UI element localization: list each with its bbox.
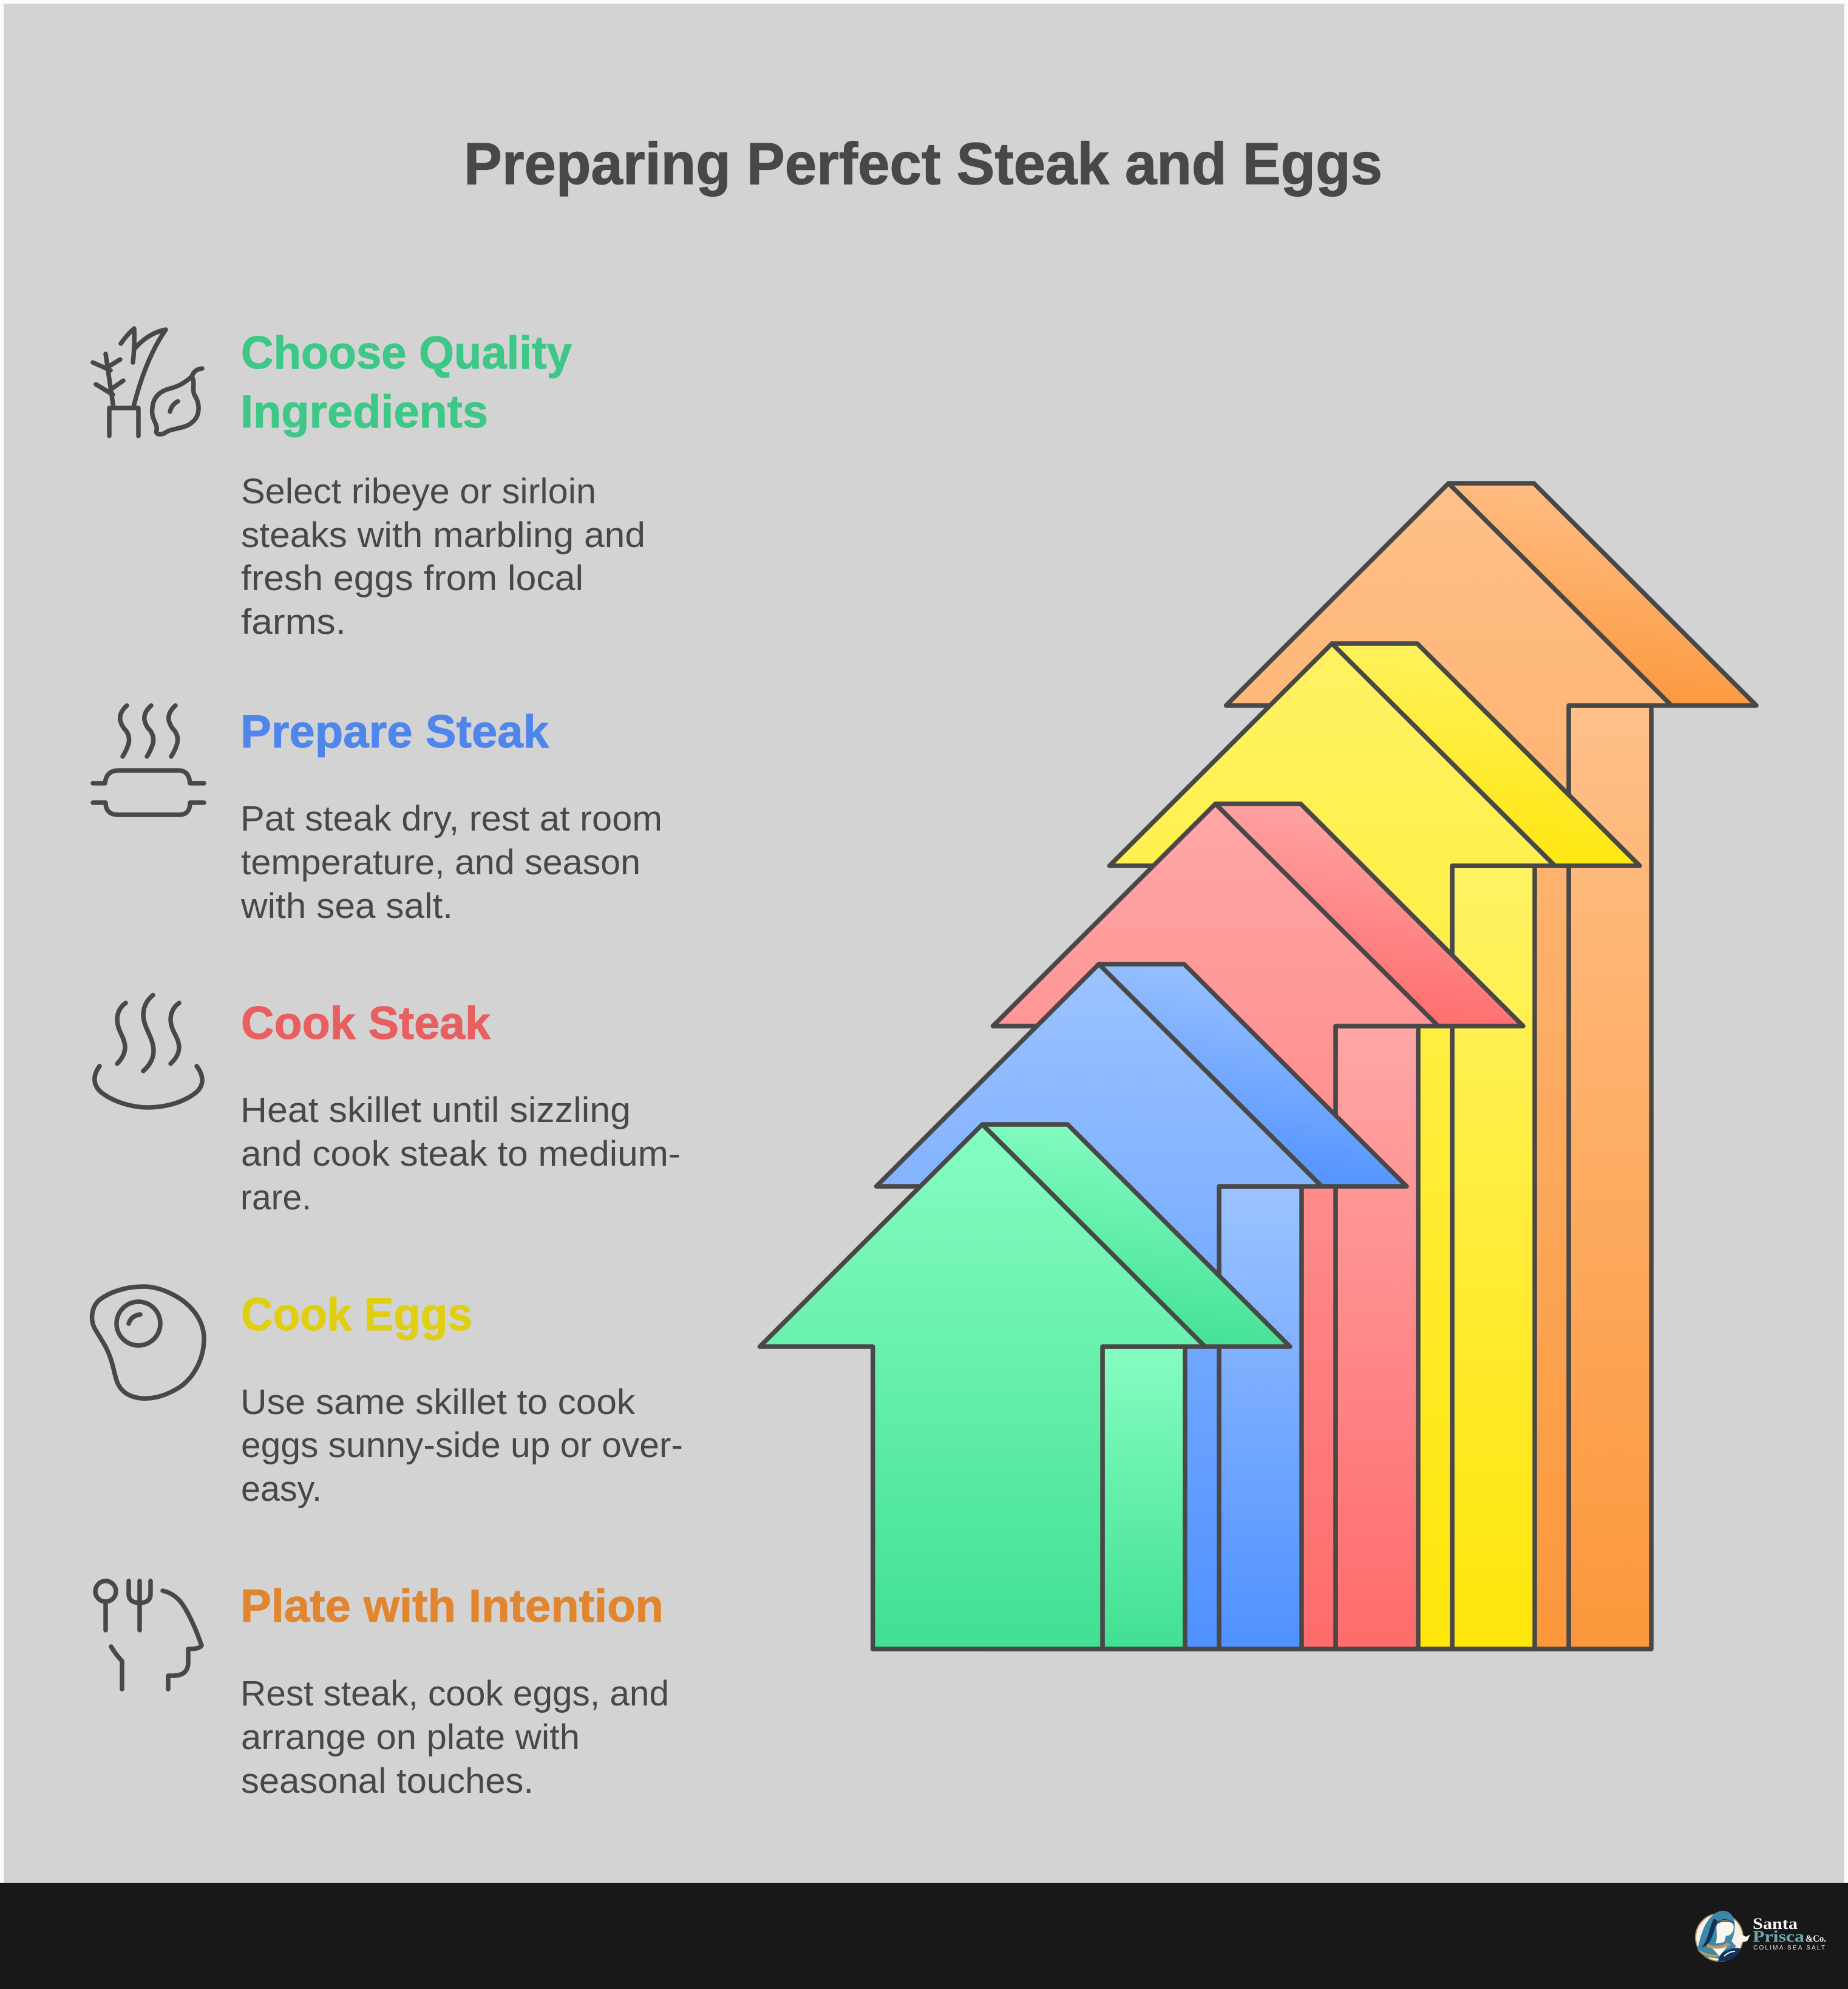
- arrow: cook eggs (yellow): [1110, 644, 1640, 1649]
- text: cook steak: Heat skillet until sizzling: [240, 1090, 631, 1130]
- logo wordmark: [1753, 1915, 1826, 1951]
- text: plate with intention: seasonal touches.: [241, 1761, 534, 1801]
- text: choose quality ingredients: [241, 472, 645, 642]
- text: cook eggs: Use same skillet to cook: [240, 1382, 636, 1422]
- heading: cook steak: Cook Steak: [241, 998, 491, 1049]
- text: cook eggs: eggs sunny-side up or over-: [241, 1426, 683, 1465]
- arrow: plate with intention (orange): [1226, 483, 1756, 1649]
- text: plate with intention: Rest steak, cook eggs, and: [240, 1674, 669, 1713]
- chart: stacked rising arrows: [760, 483, 1756, 1649]
- footer bar: [0, 1883, 1848, 1989]
- logo wordmark: Prisca: [1753, 1928, 1804, 1945]
- heading: choose quality ingredients: Ingredients: [240, 386, 488, 438]
- logo: Santa Prisca and Co.: [1696, 1911, 1826, 1962]
- text: cook eggs: [240, 1382, 683, 1509]
- text: plate with intention: arrange on plate with: [241, 1718, 580, 1757]
- heading: prepare steak: Prepare Steak: [240, 706, 549, 758]
- text: cook steak: rare.: [240, 1178, 311, 1217]
- logo wordmark: COLIMA SEA SALT: [1753, 1945, 1825, 1951]
- arrow: choose quality ingredients (green): [760, 1124, 1290, 1649]
- logo emblem: [1696, 1911, 1750, 1962]
- icon: steaming dish: [93, 706, 204, 815]
- logo wordmark: Santa: [1753, 1915, 1798, 1933]
- heading: choose quality ingredients: [240, 327, 572, 438]
- text: choose quality ingredients: Select ribeye or sirloin: [241, 472, 596, 511]
- text: cook eggs: easy.: [241, 1469, 322, 1509]
- heading: plate with intention: Plate with Intention: [240, 1580, 664, 1632]
- text: choose quality ingredients: fresh eggs from local: [241, 559, 583, 598]
- icon: steam over bowl: [95, 995, 202, 1107]
- text: prepare steak: temperature, and season: [241, 843, 640, 882]
- text: prepare steak: [240, 799, 662, 926]
- text: prepare steak: Pat steak dry, rest at room: [240, 799, 662, 838]
- title: Preparing Perfect Steak and Eggs: [464, 131, 1382, 197]
- icon: spoon fork and head: [95, 1581, 202, 1689]
- icon: fried egg: [92, 1287, 204, 1398]
- icon: plants and pear: [93, 328, 202, 436]
- text: prepare steak: with sea salt.: [240, 886, 453, 926]
- text: cook steak: [240, 1090, 681, 1217]
- text: plate with intention: [240, 1674, 669, 1801]
- arrow: prepare steak (blue): [877, 964, 1407, 1649]
- text: cook steak: and cook steak to medium-: [241, 1134, 681, 1174]
- text: choose quality ingredients: steaks with marbling and: [241, 515, 645, 555]
- heading: cook eggs: Cook Eggs: [241, 1289, 472, 1341]
- text: choose quality ingredients: farms.: [241, 602, 346, 642]
- logo wordmark: &Co.: [1806, 1934, 1826, 1944]
- heading: choose quality ingredients: Choose Quality: [241, 327, 572, 379]
- arrow: cook steak (red): [993, 804, 1523, 1649]
